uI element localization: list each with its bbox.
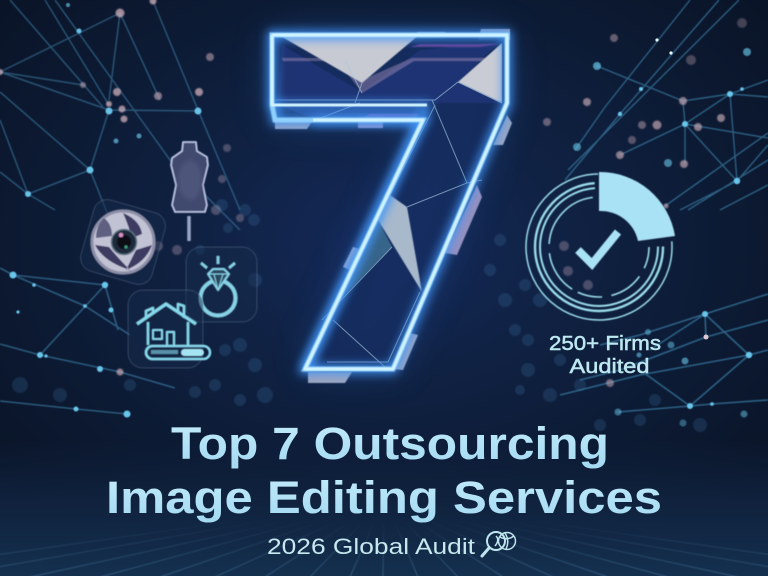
title <box>106 418 662 523</box>
big glowing number 7 <box>272 29 512 383</box>
icon tile: camera aperture <box>77 196 169 288</box>
7 pale facets <box>277 34 502 300</box>
perspective floor grid <box>0 500 768 576</box>
7 wire edges <box>272 60 502 367</box>
label: 250+ firms audited <box>549 333 661 378</box>
icon: mannequin <box>171 142 208 241</box>
icon tile: house with progress bar <box>128 290 210 368</box>
title: Image Editing Services <box>106 472 662 523</box>
network: upper left <box>0 0 240 230</box>
7 side tabs <box>275 29 512 383</box>
7 glass fill <box>272 35 507 369</box>
audit progress ring <box>521 169 677 325</box>
icon: magnifier and globe <box>482 532 516 556</box>
title: Top 7 Outsourcing <box>171 418 609 469</box>
7 top bar inner panels <box>278 42 502 119</box>
ring wedge <box>599 172 675 241</box>
icon tile: diamond ring <box>186 247 257 322</box>
subtitle: 2026 Global Audit <box>267 534 475 559</box>
network: upper right <box>543 0 768 210</box>
label: 250+ firms audited: Audited <box>570 356 650 378</box>
7 halo <box>272 35 507 369</box>
7 neon core <box>272 35 507 369</box>
bokeh clusters <box>12 144 707 432</box>
network: lower left <box>0 268 175 418</box>
camera lens <box>92 211 154 273</box>
check mark <box>578 232 618 264</box>
label: 250+ firms audited: 250+ Firms <box>549 333 661 355</box>
7 neon glow <box>272 35 507 369</box>
network: lower right <box>560 294 768 426</box>
